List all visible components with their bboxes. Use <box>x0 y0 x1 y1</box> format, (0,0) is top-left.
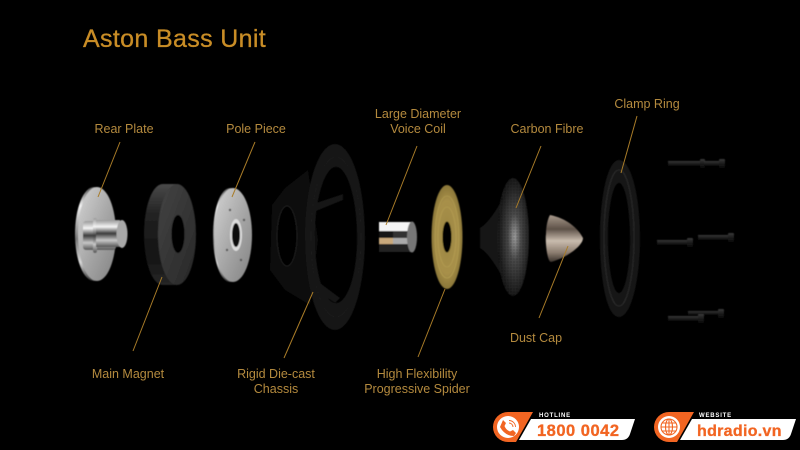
icon: phone <box>500 420 516 436</box>
part: screws <box>657 159 734 323</box>
leader: spider <box>418 289 445 357</box>
label: spider: Progressive Spider <box>364 382 470 396</box>
label: rear plate: Rear Plate <box>94 122 154 136</box>
leader: dust cap <box>539 246 568 318</box>
part: chassis <box>270 144 365 330</box>
part: dust cap <box>546 215 583 262</box>
leader: clamp ring <box>621 116 637 173</box>
website badge <box>654 412 796 442</box>
part: main magnet <box>144 184 196 285</box>
leader: rear plate <box>98 142 120 197</box>
hotline badge <box>493 412 635 442</box>
leader: chassis <box>284 292 313 358</box>
part: rear plate <box>75 187 128 281</box>
title: Aston Bass Unit <box>83 25 266 53</box>
label: pole piece: Pole Piece <box>226 122 286 136</box>
hotline caption: HOTLINE <box>539 413 571 419</box>
leader: main magnet <box>133 277 162 351</box>
label: carbon fibre: Carbon Fibre <box>511 122 584 136</box>
leader: voice coil <box>386 146 417 225</box>
part: carbon fibre cone <box>480 178 529 296</box>
label: chassis: Chassis <box>254 382 298 396</box>
part: spider <box>432 185 462 289</box>
hotline number: 1800 0042 <box>537 422 620 440</box>
website address: hdradio.vn <box>697 423 782 440</box>
label: voice coil: Voice Coil <box>390 122 446 136</box>
part: clamp ring <box>600 160 640 317</box>
part: voice coil <box>379 222 417 252</box>
label: dust cap: Dust Cap <box>510 331 562 345</box>
leader: carbon fibre <box>516 146 541 208</box>
icon: globe <box>661 419 677 435</box>
label: spider: High Flexibility <box>377 367 458 381</box>
part: pole piece <box>213 188 252 282</box>
label: voice coil: Large Diameter <box>375 107 461 121</box>
website caption: WEBSITE <box>699 413 732 419</box>
label: clamp ring: Clamp Ring <box>614 97 680 111</box>
label: chassis: Rigid Die-cast <box>237 367 315 381</box>
leader: pole piece <box>232 142 255 197</box>
label: main magnet: Main Magnet <box>92 367 165 381</box>
